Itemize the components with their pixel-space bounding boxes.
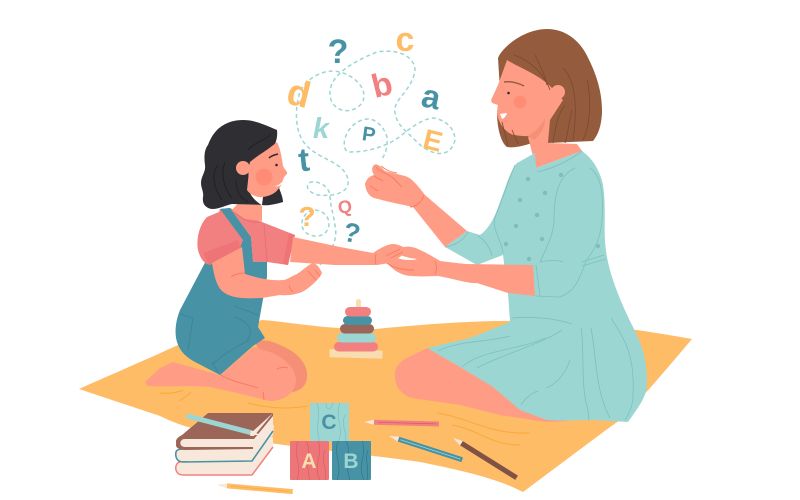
- woman: [365, 29, 647, 422]
- child legs: [145, 340, 307, 401]
- woman face details: [500, 55, 590, 146]
- woman leg: [395, 348, 570, 422]
- teal pencil: [388, 434, 463, 462]
- floating letters: ?: [341, 217, 363, 249]
- child extended arm: [290, 237, 408, 265]
- floating letters: ?: [328, 33, 348, 71]
- top book: [176, 413, 273, 450]
- block A: A: [301, 450, 317, 473]
- child overalls: [176, 208, 267, 375]
- blanket: [79, 320, 692, 492]
- bottom book: [176, 437, 273, 475]
- orange pencil: [217, 483, 293, 494]
- stacking ring toy: [329, 299, 383, 359]
- floating letters: b: [368, 64, 396, 105]
- floating letters: Q: [337, 196, 353, 218]
- floating letters: a: [418, 77, 445, 117]
- brown pencil: [452, 436, 518, 480]
- pink pencil: [364, 420, 439, 426]
- floating letters: k: [313, 113, 331, 145]
- child shirt: [197, 208, 295, 265]
- woman face: [491, 60, 563, 143]
- floating letters: d: [283, 71, 315, 116]
- floating letters: t: [297, 141, 311, 178]
- block B: B: [343, 450, 359, 473]
- floating letters: E: [420, 123, 446, 158]
- dashed letter path: [296, 51, 455, 265]
- woman lower arm and hand: [375, 247, 535, 296]
- stack of books: [176, 413, 274, 475]
- child head and hair: [201, 120, 287, 221]
- child: [145, 120, 322, 401]
- floating letters: P: [361, 123, 377, 147]
- woman hair back: [497, 29, 602, 147]
- block C: C: [321, 411, 337, 434]
- floating letters: [283, 21, 446, 249]
- woman raised arm and hand: [365, 164, 467, 247]
- woman dress: [427, 151, 647, 422]
- middle book: [176, 425, 274, 462]
- floating letters: c: [396, 21, 414, 59]
- alphabet blocks: [290, 403, 371, 480]
- woman neck: [528, 128, 582, 168]
- floating letters: ?: [298, 201, 316, 232]
- child near arm and hand: [212, 247, 322, 298]
- mint pencil on books: [186, 413, 261, 437]
